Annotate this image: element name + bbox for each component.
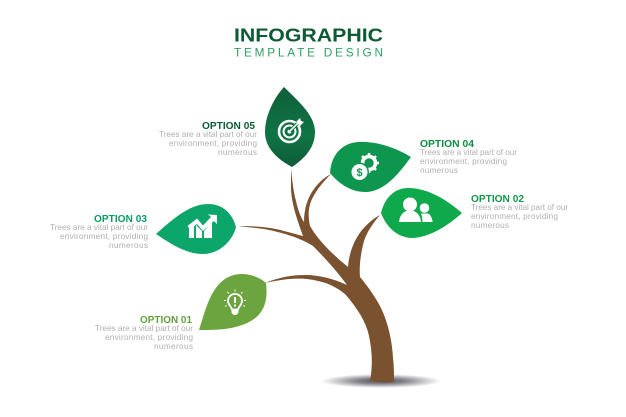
leaf: option 01 — [199, 274, 267, 330]
text: option 03: numerous — [109, 241, 148, 250]
text: option 04: environment, providing — [420, 157, 507, 166]
text: option 02 — [471, 194, 568, 230]
text: option 01 — [95, 315, 193, 351]
icon: light bulb — [224, 290, 246, 315]
leaf: option 02 — [381, 188, 462, 238]
leaf: option 05 — [265, 87, 315, 167]
text: option 03: OPTION 03 — [94, 214, 147, 225]
icon: rising chart — [188, 214, 217, 238]
text: option 05: environment, providing — [169, 139, 257, 148]
text: option 05: Trees are a vital part of our — [159, 130, 257, 139]
text: option 01: Trees are a vital part of our — [95, 324, 193, 333]
icon: people — [399, 198, 432, 222]
tree trunk and branches — [238, 168, 394, 382]
leaf: option 04 — [330, 142, 411, 192]
title: INFOGRAPHIC — [234, 24, 383, 46]
title — [234, 24, 383, 60]
text: option 05 — [159, 121, 257, 157]
text: option 04: OPTION 04 — [420, 139, 474, 150]
text: option 01: environment, providing — [105, 333, 193, 342]
text: option 02: numerous — [471, 221, 509, 230]
text: option 05: numerous — [218, 148, 257, 157]
ground shadow — [321, 374, 441, 388]
text: option 04 — [420, 139, 517, 175]
text: option 02: OPTION 02 — [471, 194, 524, 205]
icon: target — [279, 118, 304, 142]
text: option 02: Trees are a vital part of our — [471, 203, 568, 212]
text: option 01: OPTION 01 — [140, 315, 192, 326]
icon: gear and dollar coin: $ — [356, 167, 363, 179]
text: option 04: numerous — [420, 166, 458, 175]
text: option 01: numerous — [154, 342, 193, 351]
text: option 04: Trees are a vital part of our — [420, 148, 517, 157]
text: option 03 — [50, 214, 148, 250]
text: option 05: OPTION 05 — [202, 121, 255, 132]
title: TEMPLATE DESIGN — [234, 46, 383, 60]
leaf: option 03 — [156, 204, 236, 254]
text: option 03: Trees are a vital part of our — [50, 223, 148, 232]
text: option 02: environment, providing — [471, 212, 558, 221]
text: option 03: environment, providing — [60, 232, 148, 241]
